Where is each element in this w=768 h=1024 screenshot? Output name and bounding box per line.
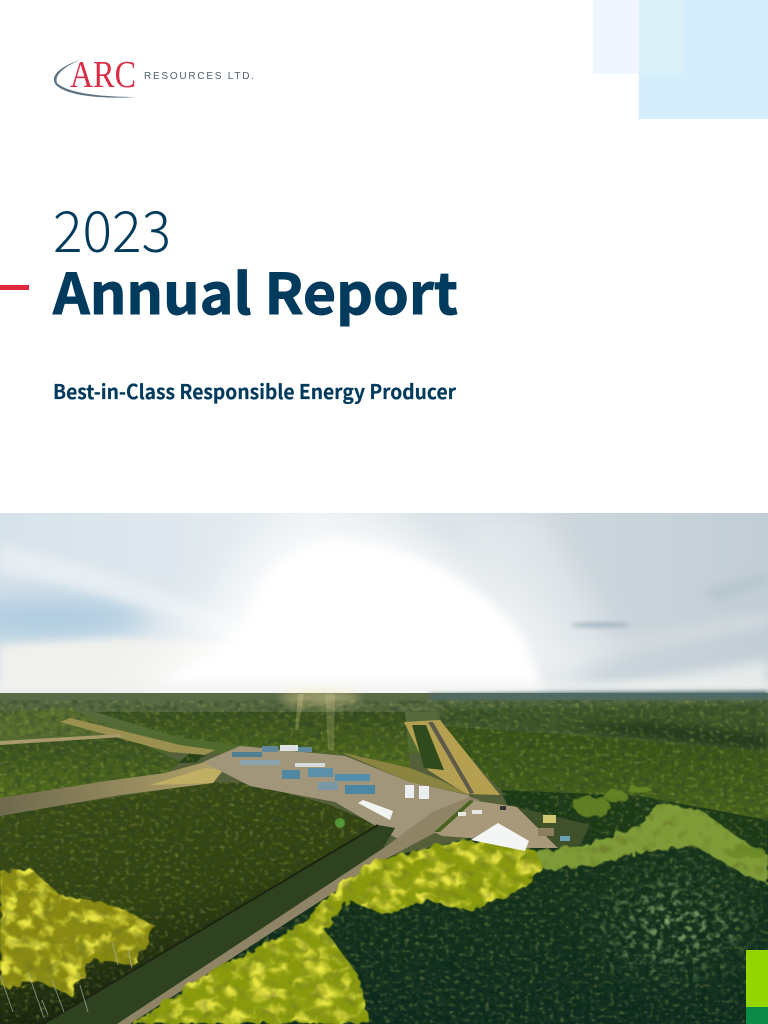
second pad [434,800,558,848]
title Annual Report: Annual Report [52,250,458,331]
aerial photograph [0,513,768,1024]
red accent dash [0,285,29,290]
title year: 2023 [53,187,171,269]
power line [43,825,378,1024]
lens flare spot [335,818,345,828]
road and clearing, left [0,718,225,816]
yellow aspens, lower left [0,867,156,998]
yellow-green foliage along road [120,840,550,1024]
white tent [471,823,529,851]
subtitle: Best-in-Class Responsible Energy Producer [53,376,456,405]
pipeline right-of-way [404,720,500,795]
tree texture [0,700,768,1024]
sky [0,513,768,700]
facility equipment [232,745,506,820]
logo: ARC Resources Ltd. [54,54,254,98]
upper lit patches beyond the ridge [574,786,765,859]
far horizon hills [430,691,768,699]
access road [117,797,480,1024]
mid band on right [440,704,768,752]
forest base blocks [0,708,768,1024]
sun-lit treetops on dark forest [584,856,764,992]
sun rays on the horizon [280,690,360,750]
white birch trunks [0,942,132,1018]
main well pad [203,746,476,838]
grass strip [43,825,395,1024]
logo wordmark ARC: ARC [70,54,136,96]
bottom right green accent [746,950,768,1024]
distant land base [0,753,530,1024]
grassy area by the pad [340,752,470,795]
logo text Resources Ltd.: RESOURCES LTD. [144,71,254,82]
equipment yard right of second pad [517,807,590,848]
decorative pale blue squares [593,0,768,119]
lit treetop ridge right [530,800,768,890]
green strip beside second pad [434,800,474,832]
logo swoosh [54,60,137,98]
